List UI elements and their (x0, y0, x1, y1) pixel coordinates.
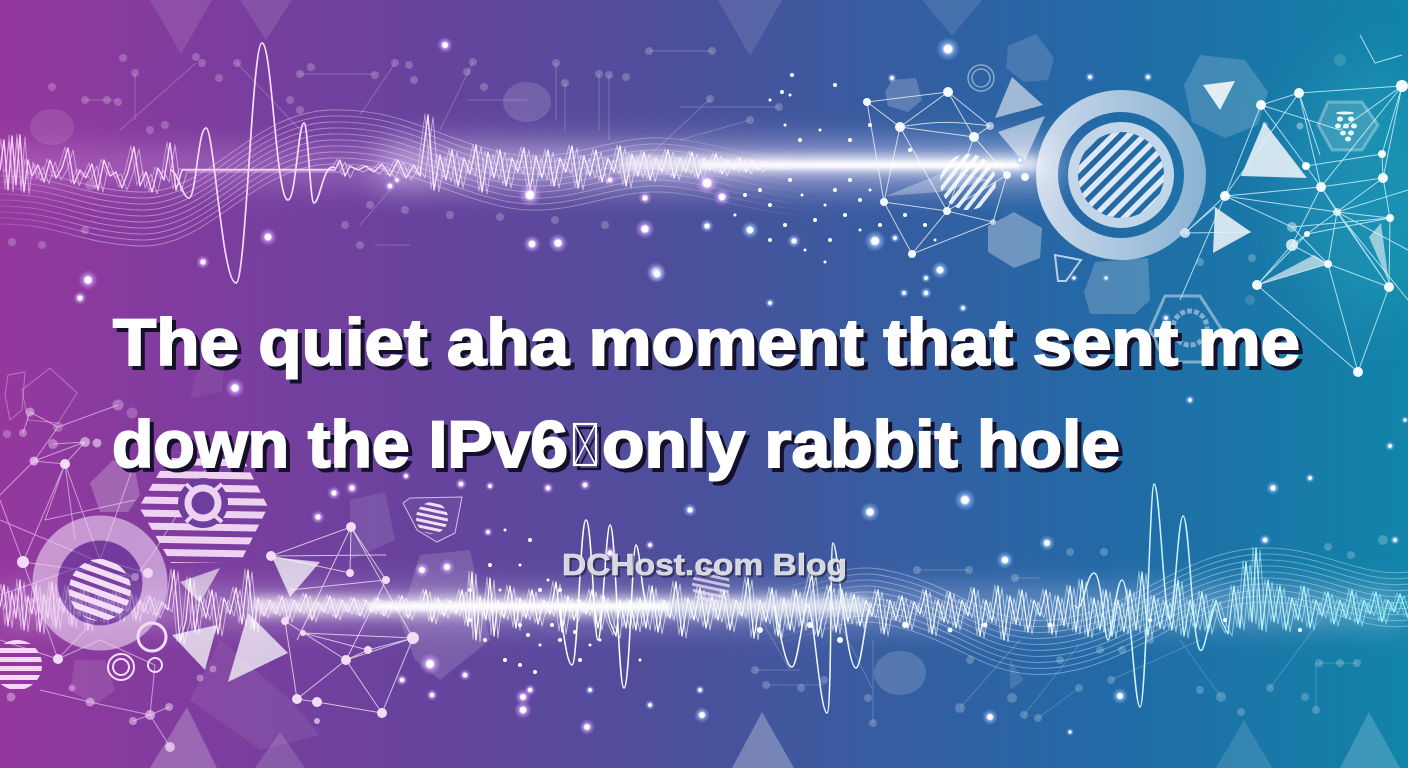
title line 2: only rabbit hole (602, 407, 1120, 481)
bottom network: translucent polygons (70, 360, 490, 750)
icon: trapezoid outline (1055, 255, 1081, 281)
icon: striped disc in bottom band (692, 566, 730, 604)
top glowing light band (0, 146, 1060, 184)
top network: node connections (867, 92, 1007, 254)
blue light particles (585, 37, 1408, 736)
bottom wave ribbons (760, 548, 1408, 674)
icon: hatched circle (940, 154, 996, 210)
teal haze on the right (1290, 60, 1408, 320)
top waveform (0, 43, 1010, 283)
bottom waveform (0, 484, 1408, 713)
title line 1: The quiet aha moment that sent me (113, 305, 1300, 379)
icon: honeycomb hexagon (1318, 102, 1378, 150)
icon: shield outline with hatched circle (403, 497, 462, 542)
bottom glowing light band (0, 592, 1408, 622)
icon: ring with striped core (45, 528, 155, 638)
icon: hexagon with gear ring behind title (1150, 296, 1222, 362)
icon: faint hexagon outlines, far left (5, 368, 77, 423)
icon: concentric rings (108, 623, 166, 680)
right network connections (1180, 35, 1408, 372)
purple light particles (73, 37, 731, 735)
bottom network: nodes (3, 400, 419, 752)
tiny sparkle dots around the light bands (468, 73, 1302, 674)
faint circuit nodes, upper band (8, 47, 783, 249)
faint circuit nodes, lower band (750, 535, 1388, 727)
top network: translucent polygons (885, 34, 1389, 314)
icon: small ring (968, 65, 994, 91)
subtitle: DCHost.com Blog (562, 547, 847, 582)
icon: striped circle, lower left (0, 640, 42, 690)
title (112, 305, 1300, 481)
icon: target circle with hatched core (1047, 101, 1195, 249)
title line 2: down the IPv6 (112, 407, 568, 481)
top wave ribbons (0, 110, 820, 246)
top network: nodes (863, 54, 1408, 377)
left network connections (0, 405, 205, 747)
icon: striped hexagon with gear ring (139, 452, 268, 563)
title line 2 (112, 407, 1120, 481)
bottom network: node connections (271, 527, 413, 713)
